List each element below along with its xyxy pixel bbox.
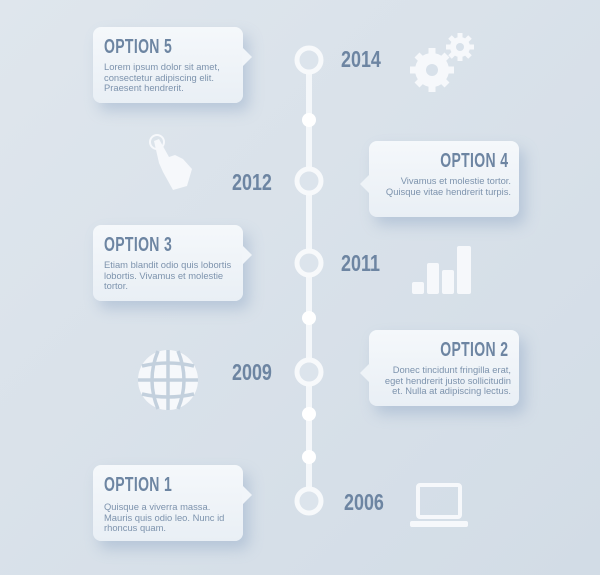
panel: option 1: Mauris quis odio leo. Nunc id <box>104 512 224 522</box>
panel: option 3: tortor. <box>104 280 128 291</box>
small dots <box>302 113 316 464</box>
panel: option 3 <box>93 225 243 301</box>
panel: option 4: Vivamus et molestie tortor. <box>401 175 511 186</box>
panel: option 2: OPTION 2 <box>440 339 508 361</box>
year 2006: 2006 <box>344 489 384 515</box>
panel: option 4: OPTION 4 <box>440 150 508 172</box>
panel: option 5: Lorem ipsum dolor sit amet, <box>104 61 220 72</box>
year 2009: 2009 <box>232 359 272 385</box>
panel: option 5: OPTION 5 <box>104 36 172 58</box>
year 2014: 2014 <box>341 46 381 72</box>
panel: option 1 <box>93 465 243 541</box>
panel: option 5: Praesent hendrerit. <box>104 82 184 93</box>
icon: laptop <box>410 485 468 527</box>
panel: option 2 <box>369 330 519 406</box>
icon: bar chart <box>412 246 471 294</box>
icon: gears <box>410 33 474 92</box>
icon: globe <box>138 350 198 410</box>
panel: option 3: Etiam blandit odio quis lobortis <box>104 259 231 270</box>
year 2012: 2012 <box>232 169 272 195</box>
year 2011: 2011 <box>341 250 380 276</box>
panel: option 3: OPTION 3 <box>104 234 172 256</box>
panel: option 1: rhoncus quam. <box>104 522 166 533</box>
panel: option 2: eget hendrerit justo sollicitudin <box>385 374 511 386</box>
panel: option 4 <box>369 141 519 217</box>
panel: option 1: Quisque a viverra massa. <box>104 501 210 512</box>
panel: option 5: consectetur adipiscing elit. <box>104 72 214 82</box>
milestone rings <box>297 48 321 513</box>
icon: hand <box>150 135 192 190</box>
panel: option 2: Donec tincidunt fringilla erat, <box>393 364 511 375</box>
panel: option 2: et. Nulla at adipiscing lectus. <box>392 385 511 396</box>
panel: option 1: OPTION 1 <box>104 474 172 496</box>
panel: option 5 <box>93 27 243 103</box>
panel: option 3: lobortis. Vivamus et molestie <box>104 270 223 280</box>
panel: option 4: Quisque vitae hendrerit turpis. <box>386 186 511 196</box>
